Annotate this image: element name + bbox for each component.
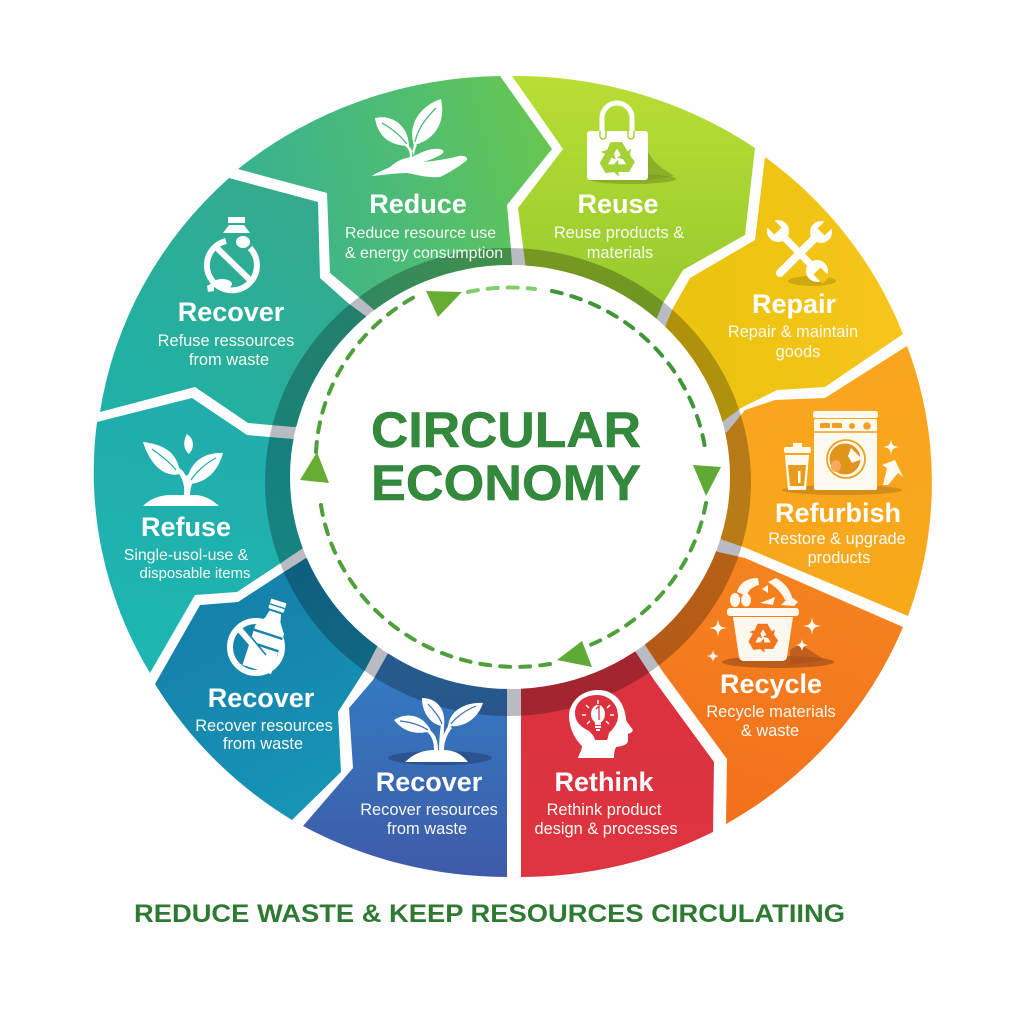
text: Rethink description: design & processes <box>534 820 678 838</box>
panel: Recycle <box>644 550 903 824</box>
text: Reduce description: Reduce resource use <box>345 225 496 242</box>
panel: Reduce <box>238 76 552 330</box>
panel: Recover (green teal) <box>100 178 390 427</box>
icon: crossed-out bottle with snake <box>207 217 257 292</box>
text: Repair description: Repair & maintain <box>728 323 858 341</box>
icon: recycling bag <box>587 103 676 184</box>
panel: Rethink <box>521 630 714 877</box>
inner grey band seen through the gaps between segments <box>265 248 751 716</box>
heading: Repair: Repair <box>752 289 837 319</box>
text: Recover description: Refuse ressources <box>158 332 294 350</box>
text: Recover description: from waste <box>387 820 467 838</box>
heading: Reuse: Reuse <box>577 189 659 219</box>
text: Refurbish description: products <box>808 549 870 567</box>
text: Repair description: goods <box>776 343 820 361</box>
icon: washing machine, bin and upgrade arrow <box>782 411 903 495</box>
text: Refuse description: disposable items <box>140 566 250 582</box>
text: Reuse description: Reuse products & <box>554 224 684 242</box>
arrow: bottom <box>557 641 592 667</box>
arrow: right <box>693 465 721 496</box>
panel: Repair <box>665 157 903 422</box>
panel: Recover (blue) <box>303 630 507 877</box>
text: Reuse description: materials <box>587 244 653 262</box>
panel: Refurbish <box>720 346 932 616</box>
icon: crossed-out plastic bottle <box>230 596 293 674</box>
icon: plant in hand <box>372 99 467 177</box>
title: Circular Economy: CIRCULAR <box>371 402 641 458</box>
heading: Recover: Recover <box>376 767 483 797</box>
heading: Recover: Recover <box>208 683 315 713</box>
arrow: top <box>426 291 462 317</box>
icon: recycling bin with sparkles <box>707 578 834 668</box>
text: Recover description: from waste <box>223 735 303 753</box>
icon: sprout seedling <box>143 434 223 506</box>
dashed circular path <box>316 288 706 667</box>
center circle with title and circular arrows <box>290 265 730 689</box>
text: Reduce description: & energy consumption <box>345 245 503 262</box>
heading: Recover: Recover <box>178 297 285 327</box>
panel: Recover (teal blue) <box>155 558 395 820</box>
icon: crossed wrenches <box>761 214 838 288</box>
heading: Reduce: Reduce <box>369 189 467 219</box>
panel: Refuse <box>94 398 303 673</box>
text: Recover description: Recover resources <box>360 801 498 819</box>
heading: Refurbish: Refurbish <box>775 498 901 528</box>
icon: head with light bulb <box>569 690 633 758</box>
arrow: left <box>300 452 329 483</box>
text: Rethink description: Rethink product <box>547 801 662 819</box>
heading: Recycle: Recycle <box>720 669 822 699</box>
infographic: circular economy wheel <box>94 76 932 922</box>
text: Refurbish description: Restore & upgrade <box>768 530 906 548</box>
heading: Rethink: Rethink <box>554 767 654 797</box>
title: Circular Economy: ECONOMY <box>371 455 641 511</box>
text: Recover description: from waste <box>189 351 269 369</box>
panel: Reuse <box>512 76 755 335</box>
text: Recycle description: & waste <box>741 722 799 740</box>
icon: sprout <box>388 698 492 765</box>
text: Recover description: Recover resources <box>195 717 333 735</box>
tagline: REDUCE WASTE & KEEP RESOURCES CIRCULATIING <box>134 900 845 928</box>
text: Refuse description: Single-usol-use & <box>124 547 249 564</box>
heading: Refuse: Refuse <box>141 512 231 542</box>
text: Recycle description: Recycle materials <box>706 703 836 721</box>
